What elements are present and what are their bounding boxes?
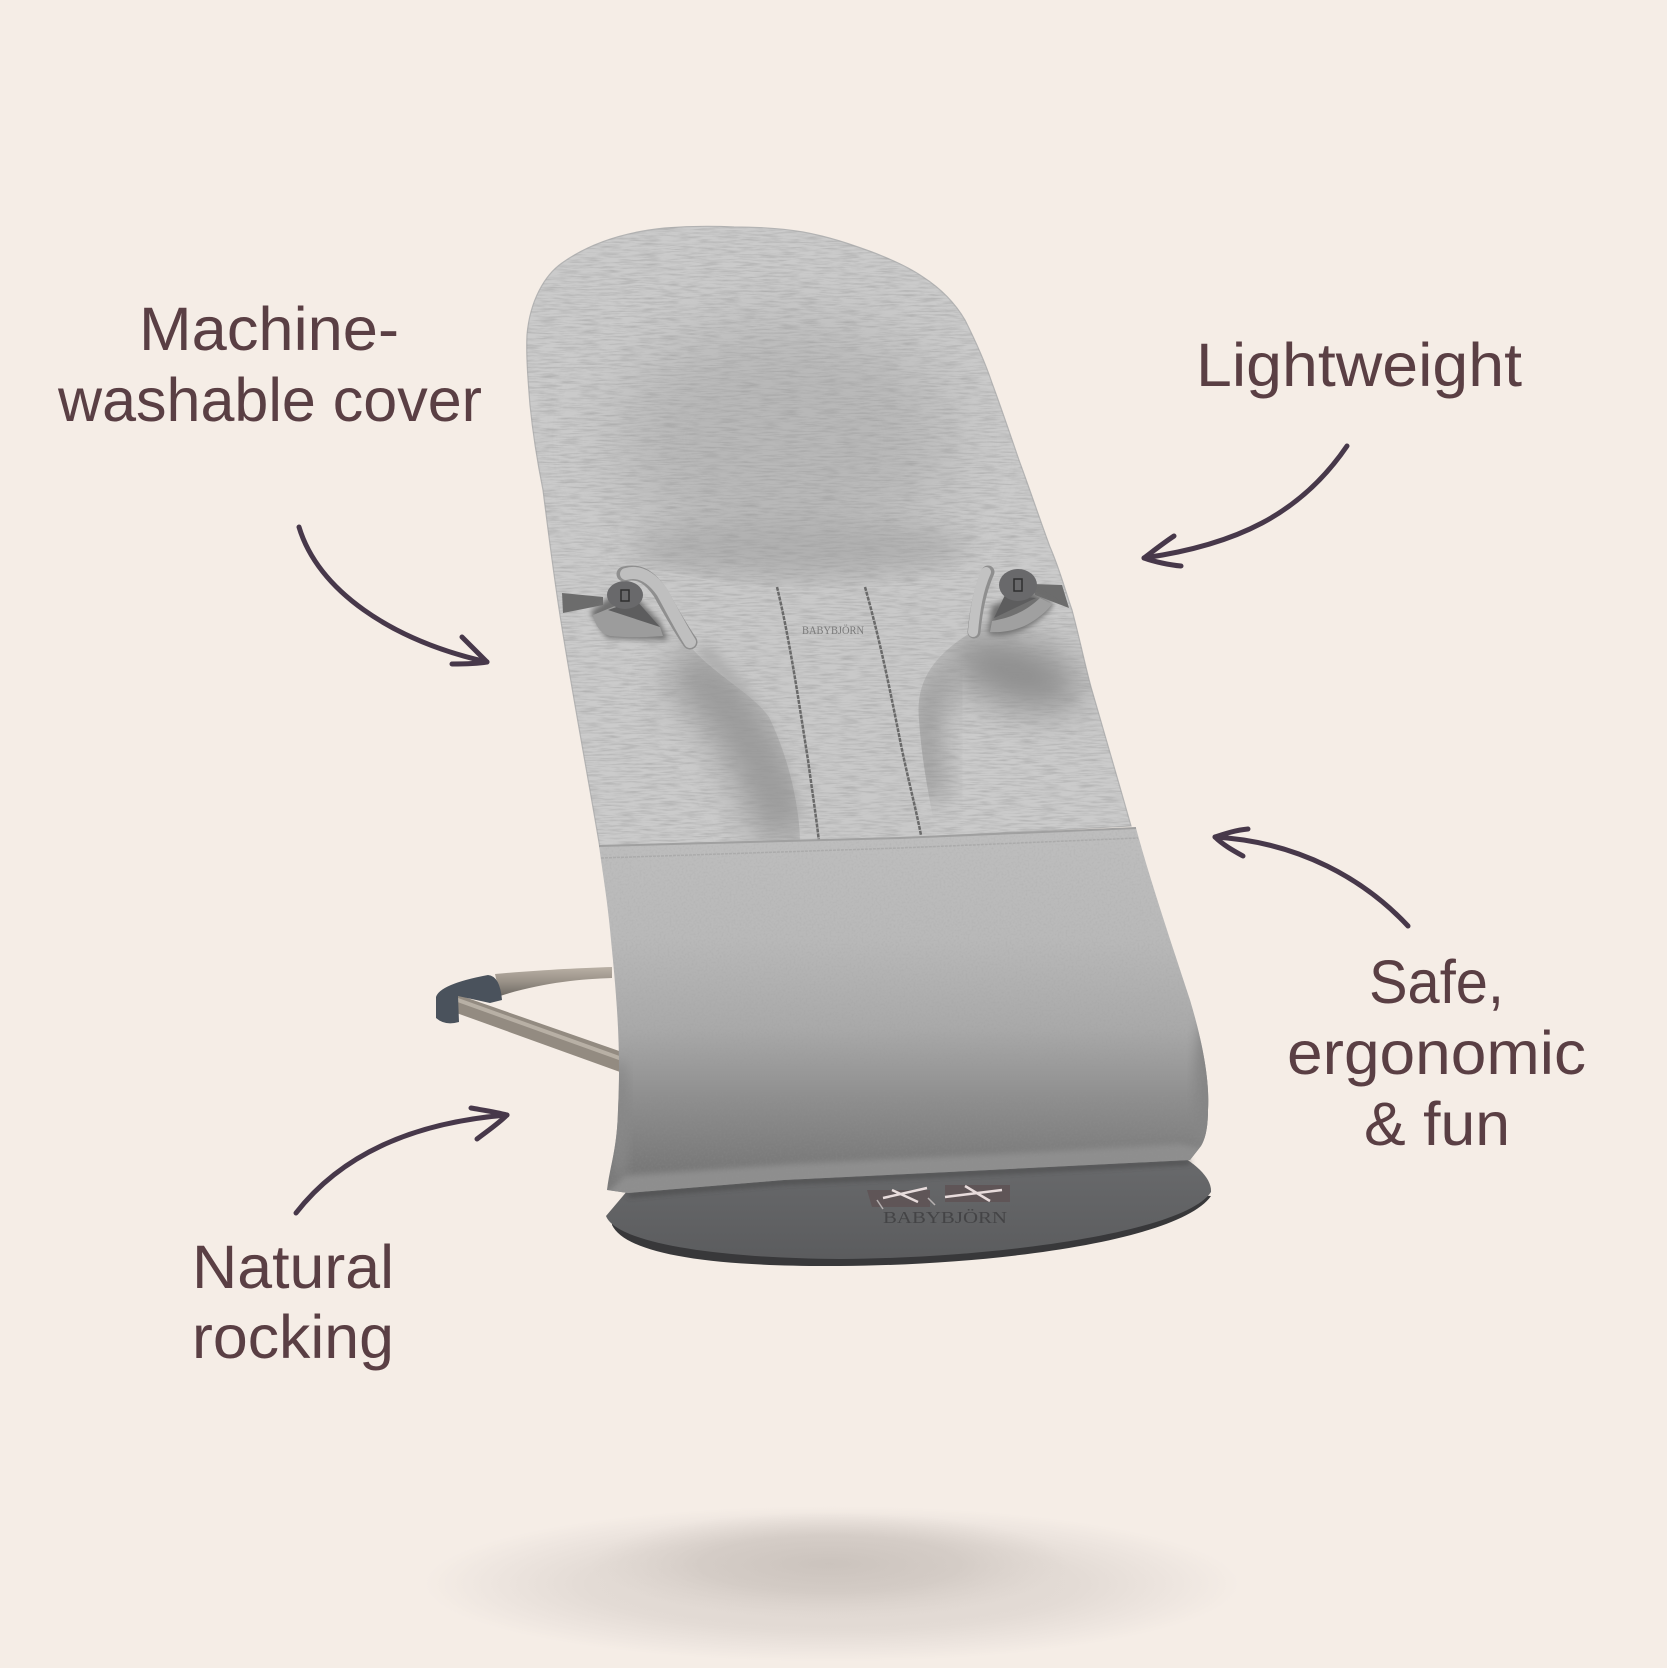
label: natural rocking: rocking <box>192 1303 394 1371</box>
label: safe, ergonomic and fun: ergonomic <box>1287 1019 1586 1087</box>
upper jersey cover <box>520 220 1140 850</box>
harness texture <box>652 569 971 839</box>
icon figure <box>945 1186 1002 1201</box>
label: safe, ergonomic and fun: Safe, <box>1369 948 1504 1016</box>
top seam <box>599 828 1136 846</box>
top surface <box>606 1150 1211 1259</box>
safety icon right <box>945 1185 1010 1202</box>
stitching left <box>777 587 819 842</box>
cast shadow on base <box>628 1162 1190 1195</box>
plate shadow <box>590 585 668 640</box>
floor shadow <box>424 1506 1240 1662</box>
lower tube highlight <box>455 999 622 1059</box>
shoulder loop <box>973 572 986 632</box>
cover shading <box>595 825 1219 1200</box>
button <box>999 569 1037 601</box>
label: machine-washable cover: Machine- <box>139 295 399 363</box>
button <box>607 581 643 609</box>
arrow: natural rocking <box>296 1108 507 1213</box>
harness body <box>650 566 971 842</box>
safety icon left <box>867 1188 935 1209</box>
stitching right <box>865 587 921 835</box>
plate shadow <box>988 590 1054 635</box>
bouncer chair <box>436 220 1219 1266</box>
shoulder loop <box>626 573 690 642</box>
base logo: BABYBJÖRN <box>883 1208 1007 1227</box>
arrow: lightweight <box>1144 446 1347 566</box>
lower cotton cover <box>595 825 1219 1200</box>
shoulder loop edge <box>974 572 988 632</box>
button slot <box>1014 579 1022 591</box>
shoulder loop edge <box>624 573 690 642</box>
label: lightweight: Lightweight <box>1196 331 1522 399</box>
woven logo: BABYBJÖRN <box>802 623 864 637</box>
label: machine-washable cover <box>57 295 482 434</box>
icon legs <box>877 1198 935 1209</box>
cover base <box>599 828 1208 1193</box>
stitch line <box>601 838 1138 858</box>
left buckle <box>590 573 690 642</box>
base plate <box>606 1150 1211 1266</box>
button slot <box>621 590 629 601</box>
icon figure <box>883 1188 927 1202</box>
strap left <box>562 593 603 613</box>
cover base <box>527 226 1131 848</box>
shadow core <box>590 1512 1070 1616</box>
shadow outer <box>424 1506 1240 1662</box>
arrow: safe, ergonomic and fun <box>1215 829 1408 926</box>
arrow: machine-washable cover <box>299 527 487 664</box>
plate ring <box>990 598 1052 632</box>
metal frame <box>436 967 622 1072</box>
plate inner <box>994 595 1036 618</box>
label: safe, ergonomic and fun <box>1287 948 1586 1158</box>
dark connector <box>436 975 502 1023</box>
icon tile <box>867 1190 930 1207</box>
icon tile <box>945 1185 1010 1202</box>
right buckle <box>973 569 1054 635</box>
underside rim <box>612 1190 1211 1266</box>
lower tube fill <box>451 993 622 1072</box>
strap right <box>1032 584 1069 608</box>
label: safe, ergonomic and fun: & fun <box>1364 1090 1510 1158</box>
plate inner <box>608 600 660 627</box>
upper tube <box>495 967 612 996</box>
label: machine-washable cover: washable cover <box>57 366 482 434</box>
label: natural rocking <box>192 1233 394 1371</box>
plate ring <box>593 606 663 637</box>
infographic canvas <box>58 226 1584 1648</box>
cover shading <box>520 220 1140 850</box>
harness <box>685 576 968 840</box>
label: natural rocking: Natural <box>192 1233 394 1301</box>
